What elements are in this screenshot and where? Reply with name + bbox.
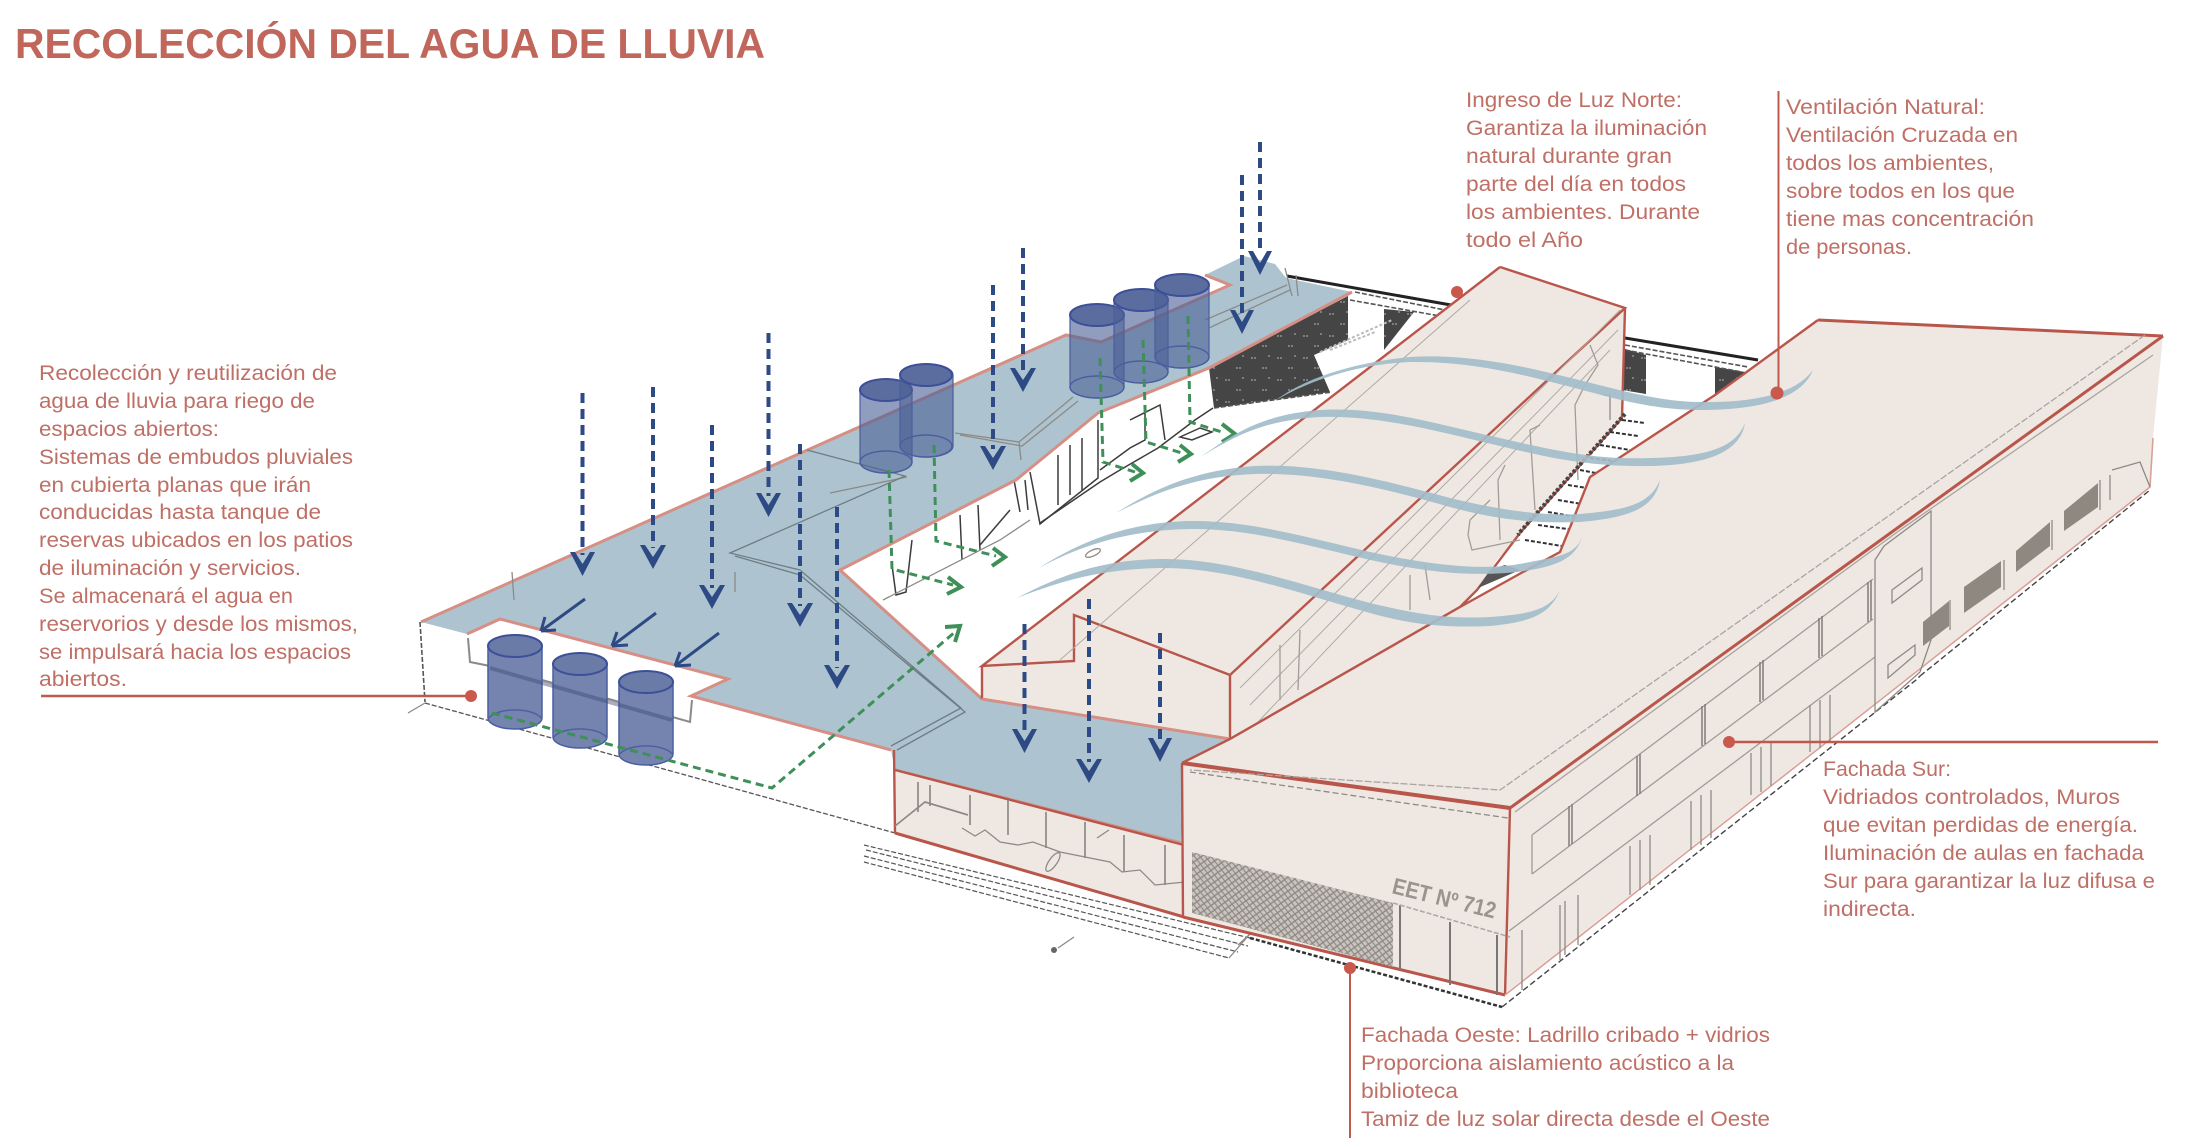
rain arrow <box>1248 142 1272 275</box>
courtyard facade sketch <box>883 405 1213 600</box>
text block: natural ventilation: Ventilación Natural: <box>1786 96 1985 119</box>
text block: rainwater collection: conducidas hasta tanque de <box>39 501 321 524</box>
rain arrow <box>1148 633 1172 762</box>
text block: natural ventilation <box>1786 96 2034 259</box>
tank 8 <box>619 671 673 765</box>
panel: blue collection roof <box>421 256 1352 843</box>
white strip between the buildings <box>1477 395 1715 590</box>
tank 6 <box>488 635 542 729</box>
text block: rainwater collection: reservorios y desde los mismos, <box>39 613 358 636</box>
callout leader: south facade <box>1723 736 2158 748</box>
text block: south facade: indirecta. <box>1823 898 1916 921</box>
text block: north light: parte del día en todos <box>1466 173 1686 196</box>
rain arrows falling on the roof <box>570 142 1272 783</box>
west facade brick lattice <box>1192 852 1393 967</box>
text block: rainwater collection: Recolección y reutilización de <box>39 362 337 385</box>
tank 1 <box>860 379 912 473</box>
text block: rainwater collection: en cubierta planas que irán <box>39 474 311 497</box>
callout leader: north light marker <box>1451 286 1463 298</box>
text block: natural ventilation: Ventilación Cruzada en <box>1786 124 2018 147</box>
text block: north light: los ambientes. Durante <box>1466 201 1700 224</box>
text block: west facade <box>1361 1024 1770 1131</box>
text block: rainwater collection: se impulsará hacia los espacios <box>39 641 351 664</box>
text block: south facade: Vidriados controlados, Muros <box>1823 786 2120 809</box>
text block: rainwater collection: Sistemas de embudos pluviales <box>39 446 353 469</box>
wall outline of west wing and ground line <box>408 622 1250 958</box>
rain arrow <box>1230 175 1254 334</box>
tank 5 <box>1155 274 1209 368</box>
text block: south facade <box>1823 758 2155 921</box>
rain arrow <box>1076 599 1102 783</box>
text block: rainwater collection: reservas ubicados en los patios <box>39 529 353 552</box>
tank 3 <box>1070 304 1124 398</box>
title: RECOLECCIÓN DEL AGUA DE LLUVIA <box>15 19 765 67</box>
panel: west low wing facade <box>894 750 1185 917</box>
text block: south facade: Fachada Sur: <box>1823 758 1951 781</box>
text block: natural ventilation: sobre todos en los que <box>1786 180 2015 203</box>
rain arrow <box>640 387 666 569</box>
text block: south facade: Sur para garantizar la luz difusa e <box>1823 870 2155 893</box>
text block: rainwater collection: Se almacenará el agua en <box>39 585 293 608</box>
rain arrow <box>980 285 1006 470</box>
tank 2 <box>900 364 953 457</box>
text block: rainwater collection: de iluminación y servicios. <box>39 557 301 580</box>
text block: north light <box>1466 89 1707 252</box>
text block: natural ventilation: tiene mas concentración <box>1786 208 2034 231</box>
water tanks on the roof <box>860 274 1209 473</box>
rain arrow <box>570 393 595 576</box>
text block: south facade: que evitan perdidas de energía. <box>1823 814 2138 837</box>
text block: west facade: Tamiz de luz solar directa desde el Oeste <box>1361 1108 1770 1131</box>
rain arrow <box>1010 248 1036 392</box>
callout leader: natural ventilation <box>1770 91 1784 400</box>
text block: rainwater collection: abiertos. <box>39 668 127 691</box>
text block: rainwater collection: espacios abiertos: <box>39 418 219 441</box>
solid run-off arrows <box>541 599 719 666</box>
tank 4 <box>1114 289 1168 383</box>
school sign lettering: EET Nº 712 <box>1390 873 1499 923</box>
text block: natural ventilation: de personas. <box>1786 236 1912 259</box>
panel: central pointed building <box>982 267 1645 739</box>
south facade windows and mullions <box>1509 579 1875 931</box>
text block: north light: Ingreso de Luz Norte: <box>1466 89 1682 112</box>
rain arrow <box>1012 624 1037 753</box>
rain arrow <box>756 333 781 517</box>
rain arrow <box>787 444 813 627</box>
text block: west facade: Proporciona aislamiento acústico a la <box>1361 1052 1734 1075</box>
text block: natural ventilation: todos los ambientes, <box>1786 152 1994 175</box>
text block: north light: todo el Año <box>1466 229 1583 252</box>
text block: rainwater collection: agua de lluvia para riego de <box>39 390 315 413</box>
text block: north light: Garantiza la iluminación <box>1466 117 1707 140</box>
back wall with dark openings <box>1209 276 1758 408</box>
rain arrow <box>699 425 725 609</box>
water tanks on the ground <box>488 635 673 765</box>
text block: west facade: biblioteca <box>1361 1080 1458 1103</box>
tank 7 <box>553 653 607 748</box>
text block: west facade: Fachada Oeste: Ladrillo cribado + vidrios <box>1361 1024 1770 1047</box>
text block: rainwater collection <box>39 362 358 691</box>
panel: main building with south and west facades <box>1182 320 2163 1007</box>
ventilation air currents <box>1017 356 1813 626</box>
callout leader: west facade <box>1344 962 1356 1138</box>
green dashed pipes <box>492 316 1235 788</box>
callout leader: rain collection <box>41 690 477 702</box>
text block: south facade: Iluminación de aulas en fachada <box>1823 842 2144 865</box>
rain arrow <box>824 507 850 689</box>
text block: north light: natural durante gran <box>1466 145 1672 168</box>
